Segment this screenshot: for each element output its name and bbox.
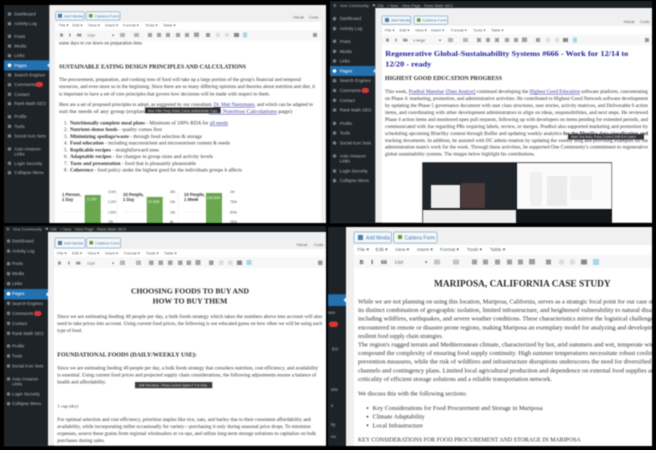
admin sidebar: Dashboard (14, 12, 36, 16)
admin sidebar: Contact (14, 92, 30, 97)
sections intro: We discuss this with the following sections: (358, 391, 467, 398)
admin sidebar: Profile (340, 121, 353, 126)
admin sidebar: Profile (12, 344, 25, 348)
editor menu and toolbar: Edit ▾ (72, 23, 83, 28)
numbered principles list: Coherence - food policy under the highest good for the individuals groups it affects (70, 169, 242, 174)
editor menu and toolbar: Table ▾ (164, 250, 177, 256)
editor menu and toolbar: Tools ▾ (467, 247, 483, 253)
cropped admin sidebar (328, 227, 346, 446)
editor menu and toolbar: View ▾ (88, 250, 99, 256)
editor menu and toolbar: Insert ▾ (105, 250, 118, 256)
principles paragraph (59, 103, 313, 115)
admin bar (330, 1, 652, 8)
numbered principles list: Taste and presentation - food that is pleasantly pleasurable (70, 162, 197, 167)
editor menu and toolbar: B (360, 260, 364, 266)
admin sidebar: Posts (12, 261, 24, 266)
intro paragraph: type of food. (57, 329, 82, 334)
bar charts: calories per person, group, week: 10 People, (123, 192, 144, 197)
grains paragraph (57, 418, 317, 444)
progress paragraph: This week, Pradhul Manohar [Data Analyst] continued developing the Highest Good Education software platform, concentrating (385, 90, 649, 95)
admin sidebar: Contact (12, 321, 28, 326)
numbered principles list: Adaptable recipes - for changes in group sizes and activity levels (70, 155, 213, 160)
editor buttons: Visual (293, 14, 304, 20)
grains paragraph: For optimal selection and cost efficiency, prioritize staples like rice, oats, and barley due to their consistent affordability and (57, 418, 311, 423)
editor menu and toolbar: 66 (77, 33, 82, 38)
editor menu and toolbar: File ▾ (59, 23, 69, 28)
editor menu and toolbar: B (58, 260, 61, 266)
admin sidebar: Comments (340, 88, 362, 93)
admin sidebar: Contact (340, 98, 356, 103)
admin sidebar: Links (340, 58, 351, 64)
editor menu and toolbar: Format ▾ (440, 247, 460, 253)
numbered principles list: Minimizing spoilage/waste - through food selection & storage (70, 135, 203, 140)
progress paragraph: items, and coordinating with other development administrators to align on ideas, responsibilities, and next steps. He reviewed (385, 111, 649, 116)
admin sidebar: Login Security (14, 161, 43, 166)
editor menu and toolbar: Table ▾ (490, 247, 506, 253)
case study title: MARIPOSA, CALIFORNIA CASE STUDY (434, 278, 611, 288)
editor buttons: Caldera Form (404, 236, 435, 242)
second paragraph: prevention measures, while the risk of wildfires and infrastructure disruptions underscores the need for diversified p (358, 359, 656, 366)
admin sidebar: Comments (12, 311, 34, 316)
editor menu and toolbar: File ▾ (358, 247, 370, 253)
section heading: HIGHEST GOOD EDUCATION PROGRESS (385, 76, 503, 82)
numbered principles list: 8. (64, 169, 68, 174)
intro paragraph (57, 315, 323, 334)
editor menu and toolbar: Format ▾ (124, 250, 140, 256)
tooltip (568, 134, 644, 140)
numbered principles list: 2. (64, 128, 68, 133)
editor menu and toolbar: x-large (413, 38, 426, 43)
centered heading: HOW TO BUY THEM (153, 297, 227, 306)
panel: top-right education progress screenshot (330, 1, 652, 223)
admin sidebar: Collapse Menu (14, 170, 44, 175)
admin sidebar: Social Icon Sets (12, 364, 44, 368)
admin sidebar: Tools (14, 124, 25, 129)
intro paragraph (59, 78, 316, 97)
editor menu and toolbar: Edit ▾ (72, 250, 82, 256)
tooltip (135, 382, 212, 388)
first paragraph: its distinct combination of geographic isolation, limited infrastructure, and heightened vulnerability to natural disast (358, 307, 656, 314)
panel: bottom-left choosing foods screenshot (4, 226, 326, 446)
numbered principles list: Nutrient-dense foods - quality comes first (70, 128, 163, 133)
progress paragraph: administration team's work for the week. Through these activities, he supported One Community's commitment to regenerative (385, 146, 649, 151)
collage image of progress screenshots (422, 162, 612, 223)
progress paragraph: Phase 4 action items and monitored open pull requests, following up with developers on items pending for extended periods, and (385, 118, 648, 123)
editor menu and toolbar: ▾ (425, 260, 428, 264)
admin sidebar: Login Security (340, 168, 368, 174)
progress paragraph: by updating the Phase 5 governance document with user class structures, user stories, activity matrices, and Deliverable 6 action (385, 104, 649, 109)
numbered principles list: Nutritionally complete meal plans - Minimum of 100% RDA for all needs (70, 121, 228, 126)
admin sidebar: Links (12, 382, 23, 386)
blue title: 12/20 - ready (385, 59, 432, 68)
admin sidebar: Dashboard (340, 16, 362, 21)
editor buttons (55, 238, 324, 248)
cropped admin sidebar: EO (332, 346, 339, 352)
bar charts: calories per person, group, week: 10 People, (184, 192, 205, 197)
admin sidebar: Media (14, 44, 27, 48)
grains paragraph: expenses, source these grains from regional wholesalers or co-ops, and utilize long-term storage solutions to capitalize on bulk (57, 432, 317, 437)
admin sidebar: Search Engines (340, 78, 372, 83)
editor menu and toolbar: ▾ (112, 260, 114, 266)
admin sidebar: Links (14, 53, 25, 58)
admin sidebar: Posts (340, 39, 351, 44)
editor buttons: Add Media (366, 236, 390, 242)
editor buttons: Add Media (64, 240, 84, 246)
admin bar (4, 226, 326, 232)
editor menu and toolbar: B (60, 33, 63, 38)
editor buttons: Visual (296, 242, 307, 247)
admin sidebar: Media (12, 271, 25, 276)
editor page (55, 41, 321, 223)
bar charts: calories per person, group, week: 1 Day (123, 197, 135, 202)
editor menu and toolbar: File ▾ (385, 28, 395, 32)
editor menu and toolbar: Format ▾ (123, 23, 139, 28)
editor menu and toolbar: Tools ▾ (146, 250, 158, 256)
editor buttons: Caldera Form (422, 18, 448, 23)
panel: top-left sustainable eating screenshot (4, 5, 326, 224)
tooltip: Mark Text Bold, Press Control Shift B to Insert (571, 135, 636, 139)
admin sidebar: Links (14, 152, 25, 156)
editor menu and toolbar: ▾ (439, 38, 441, 43)
editor buttons (56, 12, 319, 20)
admin sidebar: Pages (14, 63, 28, 68)
admin sidebar: Pages (12, 291, 25, 296)
blue title: Regenerative Global-Sustainability Systems #666 - Work for 12/14 to (385, 49, 629, 58)
editor menu and toolbar: Edit ▾ (376, 247, 388, 253)
admin sidebar: Collapse Menu (340, 178, 370, 183)
editor menu and toolbar: 66 (76, 260, 81, 266)
admin sidebar: Dashboard (12, 238, 34, 244)
progress paragraph (385, 90, 649, 158)
numbered principles list: Replicable recipes - straightforward ones (70, 148, 159, 153)
admin sidebar: Auto Amazon (340, 154, 366, 158)
first paragraph: encountered in remote or disaster-prone regions, making Mariposa an exemplary model for analyzing and developing (358, 324, 656, 331)
editor buttons: Code (314, 242, 324, 247)
editor menu and toolbar: I (395, 38, 397, 43)
editor menu and toolbar: I (69, 33, 71, 38)
bulleted section list (367, 405, 543, 429)
tooltip: Blue Filter Keep Share Cursor Authenticate Copy (148, 109, 218, 113)
section heading: KEY CONSIDERATIONS FOR FOOD PROCUREMENT AND STORAGE IN MARIPOSA (358, 436, 581, 443)
panel: bottom-right Mariposa case study screenshot (328, 227, 656, 446)
admin sidebar: Pages (340, 68, 353, 74)
grains paragraph: availability, while incorporating millet occasionally for variety—purchasing it only during seasonal price drops. To minimize (57, 425, 311, 430)
cropped admin sidebar: iets (331, 387, 339, 392)
editor buttons: Caldera Form (95, 240, 120, 246)
admin sidebar: Tools (12, 354, 23, 358)
progress paragraph: communicated with Joe regarding PRs requiring labels, review, or merges. Pradhul also supported marketing and promotion by (385, 125, 649, 130)
bar charts: calories per person, group, week: 1,500 (108, 210, 116, 214)
admin sidebar: Social Icon Sets (340, 140, 372, 146)
editor buttons: Code (640, 19, 650, 24)
admin sidebar: Search Engines (14, 72, 46, 78)
progress paragraph: scheduling upcoming BlueSky content through Buffer and updating weekly analytics for the BlueSky data visualization and (385, 132, 648, 137)
admin sidebar: Links (12, 281, 23, 286)
editor menu and toolbar: 66 (381, 260, 387, 266)
admin sidebar: Auto Amazon (14, 146, 41, 152)
admin sidebar: Collapse Menu (12, 401, 42, 406)
bar charts: calories per person, group, week: 2,250 (108, 200, 116, 204)
editor menu and toolbar: I (371, 260, 374, 266)
bar charts: calories per person, group, week: 1 Day (62, 197, 74, 202)
editor menu and toolbar: 66 (403, 38, 408, 43)
bar charts: calories per person, group, week: 8k (170, 220, 174, 224)
admin sidebar: Auto Amazon (12, 376, 39, 382)
second paragraph: channels and contingency plans. Limited local agricultural production and dependence on external food supplies am (358, 367, 656, 374)
intro paragraph: The procurement, preparation, and cooking tons of food will take up a large portion of the group's financial and temporal (59, 78, 302, 83)
admin bar: ⚙ One Community ⚑ 196 + New View Page Rank Math SEO (6, 226, 126, 232)
intro paragraph: need to take prices into account. Using current food prices, the following is our educated guess on how often we will be using each (57, 322, 323, 327)
tooltip (145, 108, 220, 113)
first paragraph: While we are not planning on using this location, Mariposa, California, serves as a strategic focal point for our case stu (358, 298, 656, 305)
admin sidebar: Social Icon Sets (14, 134, 47, 138)
editor menu and toolbar: Insert ▾ (417, 247, 433, 253)
bar charts: calories per person, group, week: 23k (170, 200, 176, 204)
editor buttons: Caldera Form (94, 13, 120, 18)
foundational foods paragraph: health and affordability. (57, 380, 106, 386)
editor menu and toolbar: Tools ▾ (145, 23, 157, 28)
body text fragment: some days to cut down on preparation time. (59, 42, 143, 46)
section heading: FOUNDATIONAL FOODS (DAILY/WEEKLY USE): (57, 351, 197, 358)
editor menu and toolbar: Table ▾ (163, 23, 176, 28)
admin sidebar: Login Security (12, 392, 41, 396)
bar charts: calories per person, group, week: 192,500 (206, 196, 220, 200)
cropped admin sidebar: ity (331, 422, 336, 427)
editor page (382, 45, 652, 223)
foundational foods paragraph (57, 366, 319, 386)
bulleted section list: Local Infrastructure (373, 422, 423, 429)
numbered principles list: 5. (64, 148, 68, 153)
editor menu and toolbar: Insert ▾ (105, 23, 118, 28)
bar charts: calories per person, group, week: 27,500 (148, 200, 160, 204)
editor menu and toolbar: Edit ▾ (400, 28, 410, 32)
admin sidebar: Tools (340, 130, 351, 136)
cropped admin sidebar: s (331, 403, 334, 408)
second paragraph (358, 341, 656, 383)
editor menu and toolbar (354, 245, 652, 266)
first paragraph: including wildfires, earthquakes, and severe weather conditions. These characteristics mirror the logistical challenges (358, 316, 656, 323)
numbered principles list: 1. (64, 121, 68, 126)
subheading: 1 cup (dry) (57, 404, 79, 408)
intro paragraph: is important to have a set of core principles that govern how decisions will be made with respect to them. (59, 92, 270, 97)
first paragraph (358, 298, 656, 340)
editor menu and toolbar (382, 26, 652, 45)
second paragraph: The region's rugged terrain and Mediterranean climate, characterized by hot, arid summers and wet, temperate wint (358, 341, 656, 348)
admin sidebar: Profile (14, 114, 27, 119)
numbered principles list: 4. (64, 142, 68, 147)
progress paragraph: tracking documents. In addition, he assisted with DC admin rotation by updating the weekly blog and providing examples for the (385, 139, 649, 144)
bulleted section list: Climate Adaptability (373, 414, 426, 421)
bar charts: calories per person, group, week: 3,000 (108, 190, 116, 194)
admin sidebar: Media (340, 49, 352, 54)
editor menu and toolbar: ▾ (112, 33, 114, 38)
numbered principles list: 6. (64, 155, 68, 160)
editor buttons: Visual (624, 19, 634, 24)
foundational foods paragraph: is essential. Using current food prices and projected supply chain considerations, the following adjustments ensure a balance of (57, 374, 317, 378)
editor buttons: Code (309, 14, 319, 20)
editor menu and toolbar: 12pt (394, 260, 404, 264)
admin sidebar (4, 5, 49, 223)
admin bar: ⚙ One Community ⚑ 196 + New View Page Rank Math SEO (333, 3, 453, 8)
editor menu and toolbar: B (386, 38, 389, 43)
cropped admin sidebar: nes (328, 310, 336, 315)
intro paragraph: Since we are estimating feeding 40 people per day, a bulk foods strategy which takes the numbers above into account will also (57, 315, 323, 320)
admin sidebar: Rank Math SEO (12, 331, 44, 336)
admin sidebar: Posts (14, 34, 26, 39)
bar charts: calories per person, group, week: 500k (230, 210, 237, 214)
bar charts: calories per person, group, week: 1 Person, (62, 192, 81, 197)
editor page (54, 269, 326, 446)
editor menu and toolbar: Table ▾ (491, 28, 504, 32)
heading: SUSTAINABLE EATING DESIGN PRINCIPLES AND CALCULATIONS (59, 65, 247, 71)
editor buttons (382, 16, 650, 24)
editor menu and toolbar: 12pt (87, 33, 96, 38)
editor menu and toolbar: File ▾ (57, 250, 67, 256)
admin sidebar: Activity Log (14, 21, 37, 26)
editor buttons: Add Media (64, 13, 84, 18)
bar charts: calories per person, group, week: 250k (230, 220, 237, 224)
bar charts: calories per person, group, week: 15k (170, 210, 176, 214)
blue title (385, 49, 629, 68)
cropped admin sidebar: nu (331, 434, 336, 439)
progress paragraph: on Phase 4: marketing, promotion, and administrative activities. He contributed to Highest Good Network software development (385, 97, 649, 102)
bar charts: calories per person, group, week: 30k (170, 190, 176, 194)
bar charts: calories per person, group, week: 750k (230, 200, 237, 204)
second paragraph: compound the complexity of ensuring food supply continuity. High summer temperatures necessitate robust cooling (358, 350, 656, 357)
numbered principles list (64, 121, 242, 174)
principles paragraph: suit the needs of any group (explanations for these are on the Food Nutrition Calculations page) (59, 110, 292, 115)
admin sidebar: Search Engines (12, 301, 44, 306)
bar charts: calories per person, group, week: 2,750 (87, 198, 97, 202)
editor buttons: Add Media (391, 18, 411, 23)
admin sidebar (4, 232, 48, 446)
bar charts: calories per person, group, week (62, 190, 237, 224)
first paragraph: resilient food supply chain strategies. (358, 333, 443, 340)
editor menu and toolbar: View ▾ (415, 28, 427, 32)
centered heading (131, 286, 249, 306)
bar charts: calories per person, group, week: 1 Week (184, 197, 199, 202)
editor menu and toolbar: Tools ▾ (473, 28, 485, 32)
bulleted section list: Key Considerations for Food Procurement and Storage in Mariposa (373, 405, 543, 412)
centered heading: CHOOSING FOODS TO BUY AND (131, 286, 249, 295)
admin sidebar: Rank Math SEO (340, 108, 372, 112)
admin sidebar: Comments (14, 82, 36, 87)
editor page (354, 268, 652, 446)
admin sidebar (330, 8, 375, 223)
editor menu and toolbar: View ▾ (395, 247, 410, 253)
editor menu and toolbar: 12pt (87, 260, 96, 266)
editor menu and toolbar: View ▾ (88, 23, 100, 28)
admin sidebar: Activity Log (340, 26, 363, 31)
editor buttons (354, 232, 437, 243)
editor menu and toolbar (54, 249, 326, 269)
progress paragraph: global sustainability systems. The images below highlight his contributions. (385, 153, 535, 158)
foundational foods paragraph: Since we are estimating feeding 40 people per day, a bulk foods strategy that considers nutrition, cost efficiency, and availability (57, 366, 319, 372)
editor menu and toolbar: Format ▾ (451, 28, 467, 32)
numbered principles list: 3. (64, 135, 68, 140)
admin sidebar: Links (340, 158, 351, 164)
editor menu and toolbar: Insert ▾ (431, 28, 444, 32)
numbered principles list: 7. (64, 162, 68, 167)
intro paragraph: resources, and even more so in the beginning. Since there are so many differing opinions and theories about nutrition and diet, it (59, 85, 316, 90)
editor menu and toolbar: I (68, 260, 70, 266)
tooltip: Edit Text Area - Press Control Option F For Help (139, 383, 207, 387)
grains paragraph: purchases during sales. (57, 439, 105, 444)
numbered principles list: Food education - including macronutrient and micronutrient content & needs (70, 142, 230, 147)
principles paragraph: Here are a set of proposed principles to adopt, as suggested by our consultant, Dr. Matt Nantzmann, and which can be adapted to (59, 103, 313, 108)
editor menu and toolbar (55, 22, 321, 41)
admin sidebar: Activity Log (12, 248, 35, 254)
bar charts: calories per person, group, week: 750 (108, 220, 114, 224)
admin sidebar: Rank Math SEO (14, 101, 47, 106)
bar charts: calories per person, group, week: 1M (230, 190, 235, 194)
second paragraph: criticality of efficient storage solutions and a reliable transportation network. (358, 376, 552, 383)
